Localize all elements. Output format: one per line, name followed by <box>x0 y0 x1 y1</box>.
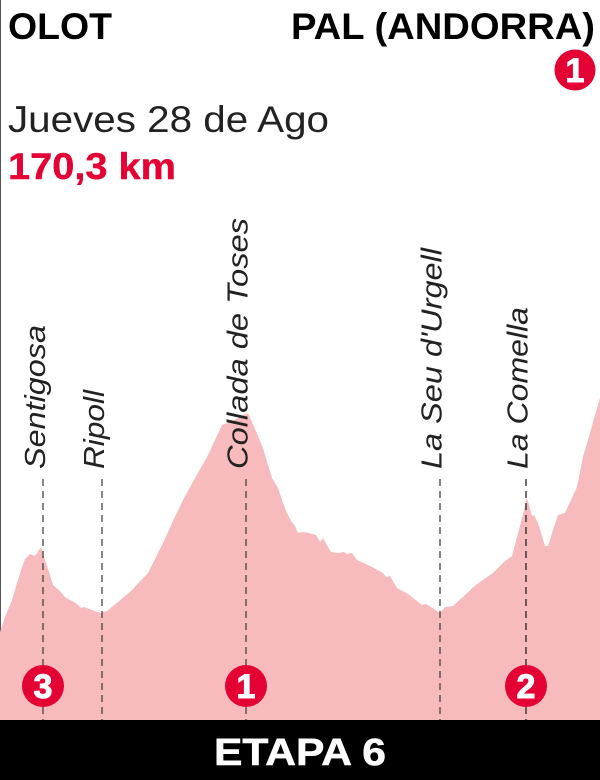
category badge 3: 3 <box>34 668 52 706</box>
elevation profile <box>0 398 600 720</box>
finish category badge <box>554 50 596 90</box>
category badge 2: 2 <box>517 668 535 706</box>
distance: 170,3 km <box>8 146 176 187</box>
finish category badge: 1 <box>566 52 584 90</box>
category badge 1 <box>225 665 267 707</box>
date: Jueves 28 de Ago <box>8 99 329 140</box>
marker: Collada de Toses: Collada de Toses <box>222 218 254 469</box>
marker: La Seu d'Urgell: La Seu d'Urgell <box>416 246 448 469</box>
marker: Sentigosa: Sentigosa <box>20 325 52 469</box>
category badge 1: 1 <box>237 668 255 706</box>
footer bar: ETAPA 6 <box>214 732 386 774</box>
marker: Ripoll: Ripoll <box>79 388 111 469</box>
marker: La Comella: La Comella <box>502 307 534 469</box>
footer bar <box>0 720 600 780</box>
category badge 3 <box>22 665 64 707</box>
header: finish town: PAL (ANDORRA) <box>291 6 595 47</box>
header: start town: OLOT <box>8 6 112 47</box>
category badge 2 <box>505 665 547 707</box>
